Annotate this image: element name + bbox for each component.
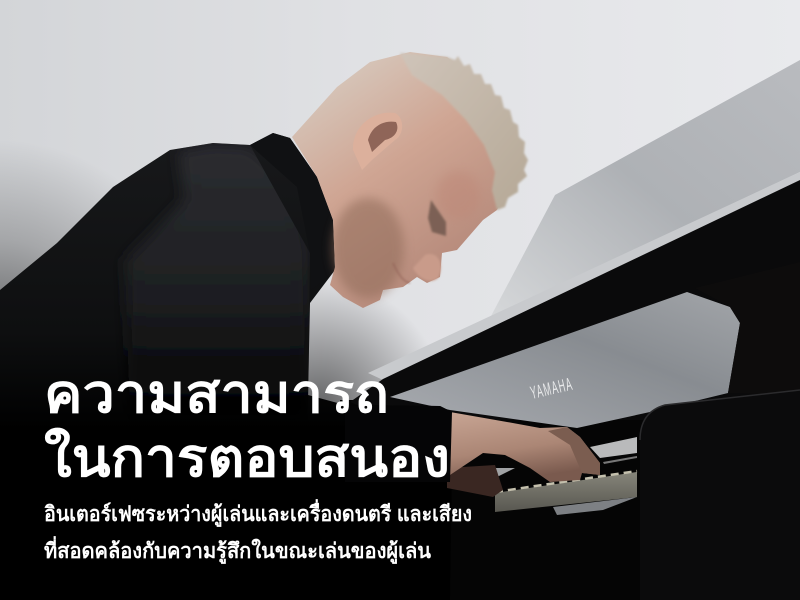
man's body in black shirt (0, 133, 452, 600)
title: ในการตอบสนอง (44, 427, 450, 488)
knuckle finger (548, 427, 600, 475)
man's hand on keys (450, 412, 600, 482)
wall shadow lower (300, 280, 450, 410)
piano front panel (390, 292, 740, 428)
piano black band (350, 180, 800, 420)
back of hand (450, 412, 600, 482)
ear (353, 113, 402, 170)
piano lid edge (368, 172, 800, 380)
music bench / piano side (640, 390, 800, 600)
wall shadow left (0, 120, 220, 380)
man's collar (250, 133, 335, 290)
piano lower body (340, 400, 800, 600)
skin (292, 52, 520, 308)
brow and eye (428, 200, 446, 236)
silver keyboard rails (493, 437, 637, 515)
mouth (393, 263, 410, 283)
nose (413, 254, 441, 281)
subtitle (44, 498, 472, 565)
shirt cuff (345, 405, 452, 482)
hair (400, 53, 528, 210)
man's second hand thumb shadow (447, 465, 503, 497)
stubble (332, 198, 404, 298)
reflection on lid (695, 262, 800, 395)
cheek shade (436, 171, 480, 219)
title (44, 365, 450, 488)
subtitle: ที่สอดคล้องกับความรู้สึกในขณะเล่นของผู้เล่น (44, 535, 432, 565)
title: ความสามารถ (44, 365, 389, 424)
piano music desk (490, 60, 800, 318)
shirt lit panel (125, 144, 310, 420)
man's head (292, 52, 528, 308)
keyboard keys (495, 471, 637, 512)
bench top edge (640, 390, 800, 440)
subtitle: อินเตอร์เฟซระหว่างผู้เล่นและเครื่องดนตรี และเสียง (44, 498, 472, 528)
YAMAHA logo: YAMAHA (528, 374, 575, 403)
